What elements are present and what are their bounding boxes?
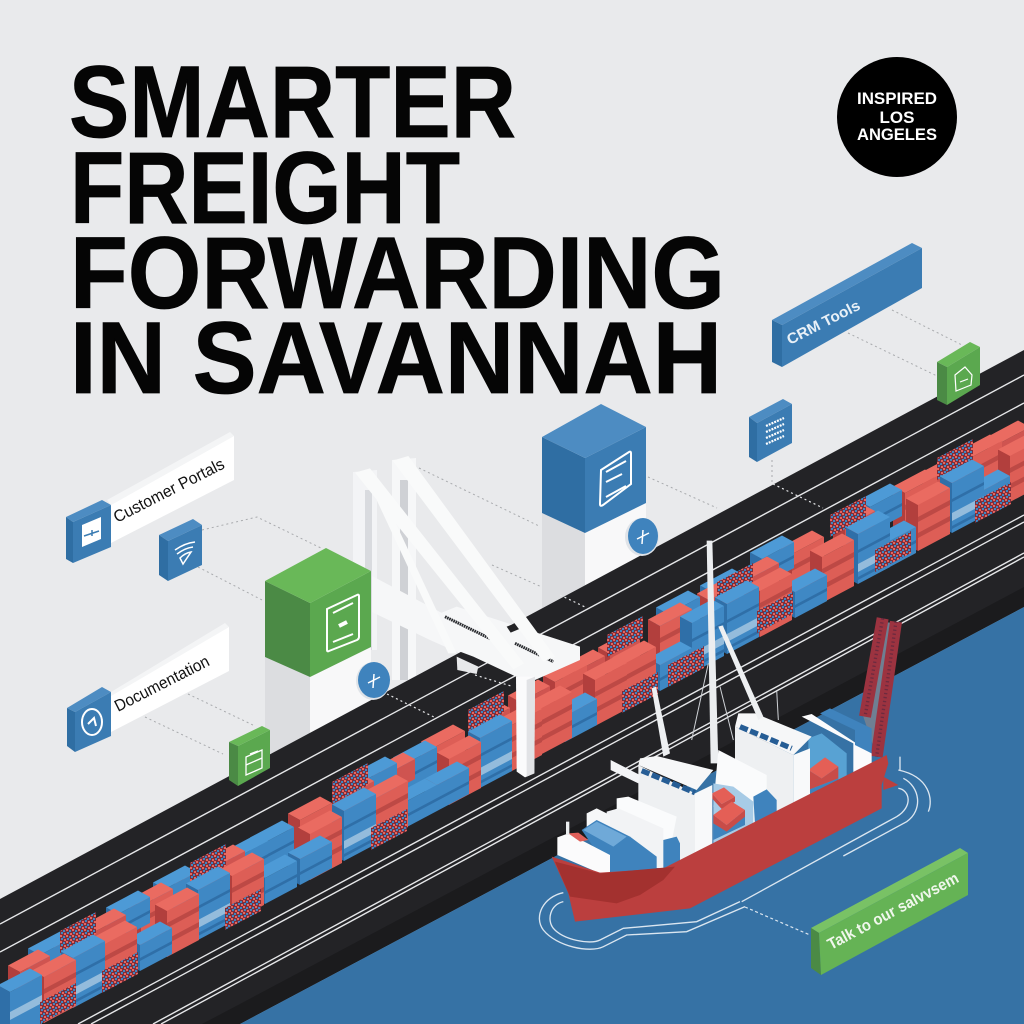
call to action: Talk to our salvvsem: Talk to our salvvsem [825,870,962,954]
ship bow cargo [557,797,680,873]
title: SMARTER [69,45,516,159]
containers: back row [8,420,1024,992]
icon: green cube right [937,342,980,405]
cargo ship [539,541,930,949]
badge: Inspired Los Angeles: ANGELES [857,125,937,144]
title: FORWARDING [70,216,725,330]
label: Documentation [67,623,229,752]
ship masts [652,541,778,763]
ship rear cargo [802,708,872,800]
label: CRM Tools [772,243,922,367]
connector lines: dotted [145,310,962,754]
ship mid cargo [712,750,777,843]
ship hull [552,755,888,922]
icon: document on green block [327,595,359,651]
crane truss [445,617,553,662]
call to action: Talk to our salvvsem [811,848,968,975]
ship tower 2 [735,713,812,822]
blue server block [542,404,646,640]
crane booms and gantry [355,456,580,777]
containers: front noise [40,482,1011,1024]
green server block [265,548,371,790]
containers: front row [0,432,1024,1024]
title [69,45,725,415]
connector to call to action [745,907,810,935]
quay road [0,350,1024,1024]
icon: small blue cube wifi [159,519,202,581]
crane booms [355,456,555,669]
crane platform [440,607,580,680]
ship tower 1 [611,756,713,868]
road markers: white dotted [387,484,823,718]
icon: small blue cube grid [749,399,792,462]
badge: Inspired Los Angeles [837,57,957,177]
label: Customer Portals: Customer Portals [111,455,228,527]
label: Customer Portals [66,432,234,563]
ship wake [539,757,930,949]
ship rudder [883,777,898,790]
crane trolley [457,657,478,674]
icon: document on blue block [600,452,631,506]
badge: Inspired Los Angeles: INSPIRED [857,89,937,108]
icon: blue plus circle [625,518,659,556]
crane front leg [516,677,535,777]
title: FREIGHT [70,131,460,245]
badge: Inspired Los Angeles: LOS [880,108,914,127]
rear crane legs [353,458,520,680]
water [240,607,1024,1024]
icon: portal [82,517,101,547]
icon: documentation [82,709,102,735]
container cut by frame [0,968,42,1024]
icon: small green cube [229,726,270,786]
containers: back row noise [60,439,973,953]
ship bow shade [555,862,675,903]
label: Documentation: Documentation [112,652,212,716]
road lane lines [0,375,1024,1024]
title: IN SAVANNAH [70,301,722,415]
icon: green block plus circle [356,662,390,700]
ship red lattice crane [863,618,898,757]
label: CRM Tools: CRM Tools [784,297,863,349]
